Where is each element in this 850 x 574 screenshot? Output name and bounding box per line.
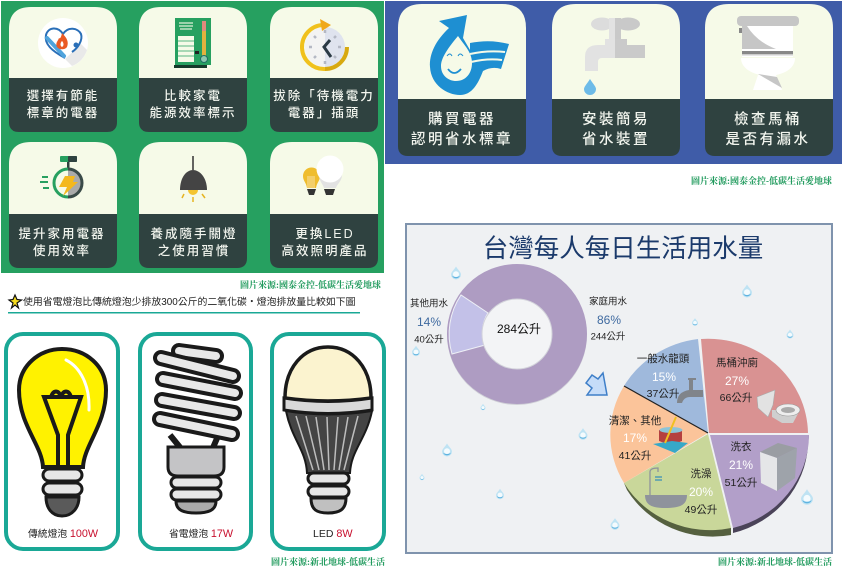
pie labels: 51公升 [725,477,757,489]
card: turn off lights [139,142,247,268]
donut chart: 244公升 [591,332,626,342]
card: energy label: 標章的電器 [27,105,99,120]
chart title: 台灣每人每日生活用水量 [483,235,763,263]
icon: mop bucket [659,430,682,444]
card: check toilet: 檢查馬桶 [734,110,802,128]
card: traditional bulb: 傳統燈泡 100W [28,527,99,540]
card: check toilet [705,4,833,156]
card: turn off lights: 之使用習慣 [158,243,230,258]
donut chart [410,265,627,405]
donut chart: 14% [417,315,441,329]
arrow [586,373,607,395]
card: check toilet: 是否有漏水 [726,131,810,148]
pie labels [609,352,758,516]
card: replace with LED: 更換LED [295,226,355,241]
card: compare efficiency: 能源效率標示 [149,105,237,120]
card: unplug standby: 拔除「待機電力 [273,89,375,103]
card: turn off lights: 養成隨手關燈 [150,226,238,241]
donut chart: 40公升 [414,334,444,346]
donut chart: 284公升 [497,322,541,336]
card: compare efficiency: 比較家電 [164,88,222,103]
pie labels: 41公升 [619,450,651,462]
pie labels: 15% [652,370,676,384]
source caption: energy tips: 圖片來源:國泰金控-低碳生活愛地球 [240,279,381,290]
source caption: water tips: 圖片來源:國泰金控-低碳生活愛地球 [691,175,832,186]
icon: star [9,295,22,308]
card: appliance efficiency: 提升家用電器 [18,226,106,241]
card: water label: 認明省水標章 [411,130,513,148]
panel: daily water use [406,224,832,553]
heading: bulb comparison: 使用省電燈泡比傳統燈泡少排放300公斤的二氧化碳・燈泡排放量比較如下圖 [23,295,356,308]
donut chart: 家庭用水 [589,296,627,308]
pie chart [609,339,809,537]
card: water saving device [552,4,680,156]
icon: bathtub [645,468,687,508]
card: unplug standby: 電器」插頭 [288,105,360,120]
icon: washing machine [760,443,797,491]
card: water label: 購買電器 [428,110,496,128]
donut chart: 其他用水 [410,298,448,310]
pie labels: 清潔、其他 [609,414,662,427]
donut chart: 86% [597,313,621,327]
pie labels: 馬桶沖廁 [716,356,758,369]
card: compare efficiency [139,7,247,132]
card: LED bulb: LED 8W [313,528,353,540]
card: traditional bulb [6,334,118,549]
card: water saving device: 安裝簡易 [582,110,650,128]
pie labels: 21% [729,458,753,472]
icons: water drops [412,266,813,530]
pie labels: 49公升 [685,504,717,516]
source caption: bulbs: 圖片來源:新北地球-低碳生活 [271,556,385,567]
pie labels: 37公升 [647,388,679,400]
pie labels: 20% [689,485,713,499]
icon: tap [677,378,703,403]
card: replace with LED [270,142,378,268]
card: energy label: 選擇有節能 [27,88,99,103]
panel: water saving tips [385,1,842,164]
card: LED bulb [272,334,384,549]
icon: toilet [757,390,775,417]
pie labels: 17% [623,431,647,445]
card: unplug standby [270,7,378,132]
source caption: water use: 圖片來源:新北地球-低碳生活 [718,556,832,567]
card: CFL bulb: 省電燈泡 17W [169,527,234,540]
card: CFL bulb [140,334,251,549]
pie labels: 一般水龍頭 [637,352,690,365]
card: energy label [9,7,117,132]
pie labels: 27% [725,374,749,388]
pie labels: 洗衣 [730,440,752,453]
card: water saving device: 省水裝置 [582,131,650,148]
pie labels: 66公升 [720,392,752,404]
card: appliance efficiency: 使用效率 [33,243,91,258]
card: appliance efficiency [9,142,117,268]
pie labels: 洗澡 [690,468,712,480]
panel: energy saving tips [1,1,384,273]
card: replace with LED: 高效照明產品 [281,243,369,258]
card: water label [398,4,526,156]
